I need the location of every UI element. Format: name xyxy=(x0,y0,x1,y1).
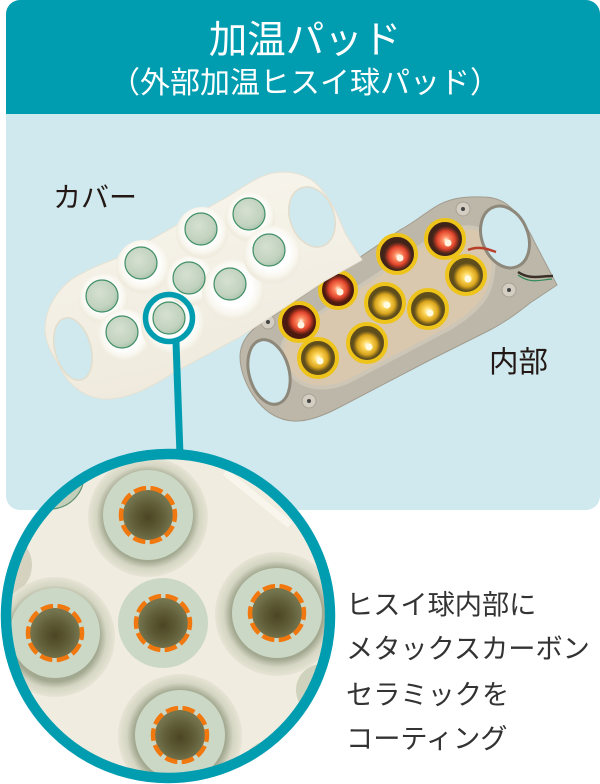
label: inside: 内部 xyxy=(489,346,548,379)
pad cover with jade balls xyxy=(45,172,362,399)
title: 加温パッド xyxy=(209,19,401,62)
lens border xyxy=(6,454,330,778)
description text: ヒスイ球内部に xyxy=(346,589,536,620)
well centre xyxy=(118,578,208,668)
yellow disc 4 xyxy=(409,290,447,328)
description text: セラミックを xyxy=(346,679,509,710)
right hole xyxy=(472,199,538,275)
red disc 1 xyxy=(280,303,318,341)
red disc 3 xyxy=(378,235,416,273)
yellow disc 2 xyxy=(348,324,386,362)
label: cover: カバー xyxy=(53,182,137,213)
magnified view of jade ball interior xyxy=(0,441,348,784)
description text xyxy=(346,589,590,754)
red disc 4 xyxy=(426,220,464,258)
screw posts xyxy=(456,202,470,216)
yellow disc 1 xyxy=(299,339,337,377)
pad interior with heating elements xyxy=(240,197,557,421)
header band xyxy=(6,0,600,114)
panel: light blue background xyxy=(6,100,600,510)
well top xyxy=(88,457,208,577)
well left xyxy=(0,577,115,697)
description text: メタックスカーボン xyxy=(346,633,590,664)
description text: コーティング xyxy=(346,723,508,754)
red disc 2 xyxy=(320,272,356,308)
yellow disc 5 xyxy=(447,256,485,294)
inner floor xyxy=(282,227,494,387)
left hole xyxy=(241,335,297,409)
well bottom xyxy=(118,674,242,773)
well right xyxy=(215,552,325,676)
subtitle: （外部加温ヒスイ球パッド） xyxy=(110,67,500,100)
wiring xyxy=(468,248,496,252)
yellow disc 3 xyxy=(366,284,404,322)
callout ring and leader line xyxy=(146,294,192,455)
